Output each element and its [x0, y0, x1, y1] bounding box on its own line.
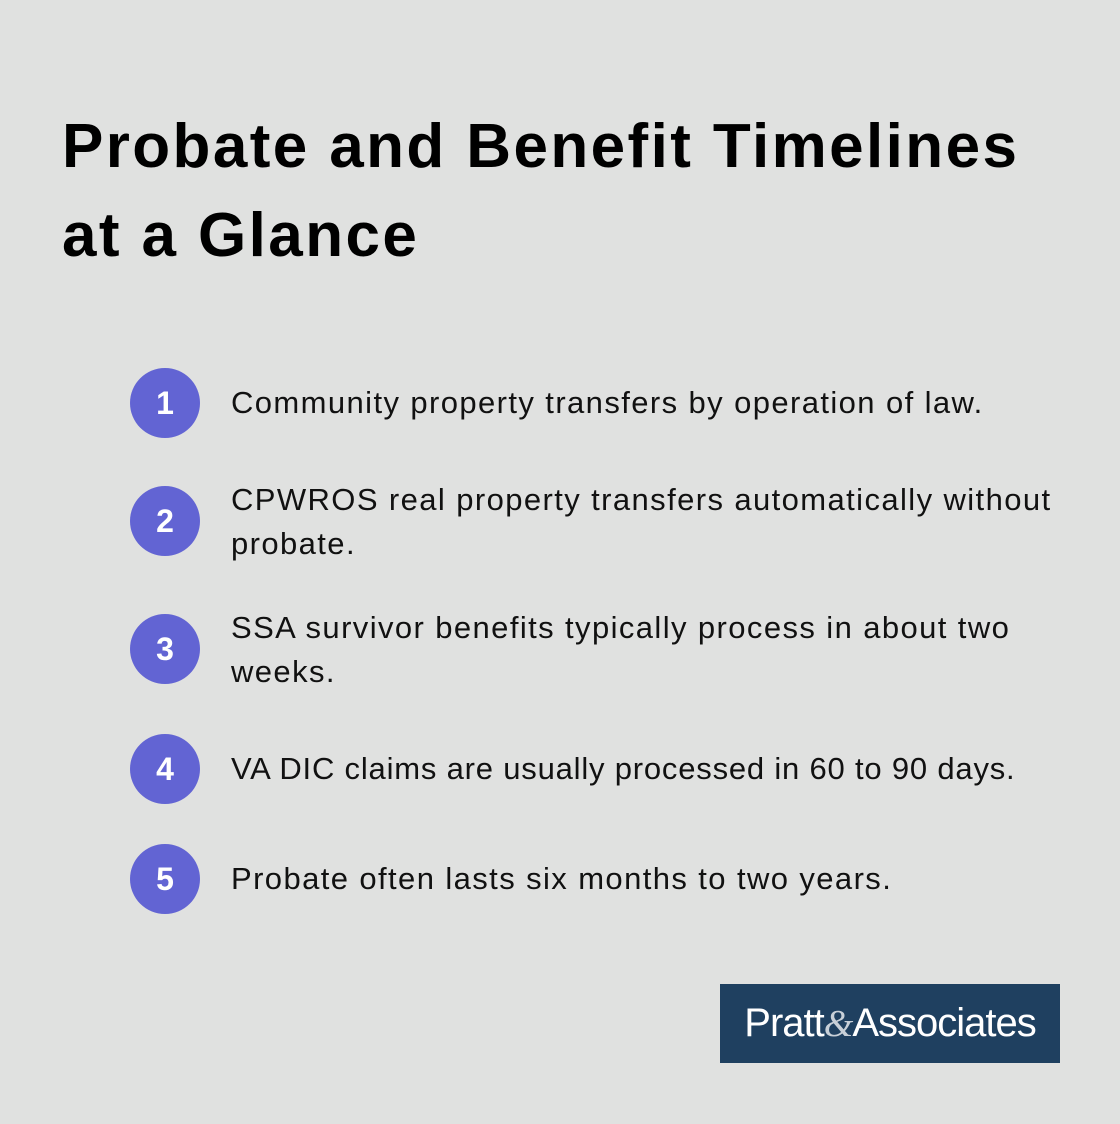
circle 4: 4: [156, 751, 174, 787]
text 3: SSA survivor benefits typically process in about two weeks.: [231, 610, 1010, 689]
title: [62, 112, 1019, 270]
text 2: CPWROS real property transfers automatically without probate.: [231, 482, 1052, 561]
logo: Pratt&Associates: [744, 1001, 1036, 1045]
item 3: [130, 610, 1010, 689]
item 5: [130, 844, 892, 914]
item 4: [130, 734, 1015, 804]
circle 1: [130, 368, 200, 438]
title: at a Glance: [62, 201, 419, 270]
text 5: Probate often lasts six months to two years.: [231, 861, 892, 896]
circle 3: [130, 614, 200, 684]
item 2: [130, 482, 1052, 561]
circle 5: 5: [156, 861, 174, 897]
text 4: VA DIC claims are usually processed in 60 to 90 days.: [231, 751, 1015, 786]
circle 3: 3: [156, 631, 174, 667]
text 1: Community property transfers by operation of law.: [231, 385, 984, 420]
item 1: [130, 368, 984, 438]
circle 1: 1: [156, 385, 174, 421]
circle 4: [130, 734, 200, 804]
circle 2: [130, 486, 200, 556]
circle 5: [130, 844, 200, 914]
logo: [720, 984, 1060, 1063]
title: Probate and Benefit Timelines: [62, 112, 1019, 181]
circle 2: 2: [156, 503, 174, 539]
